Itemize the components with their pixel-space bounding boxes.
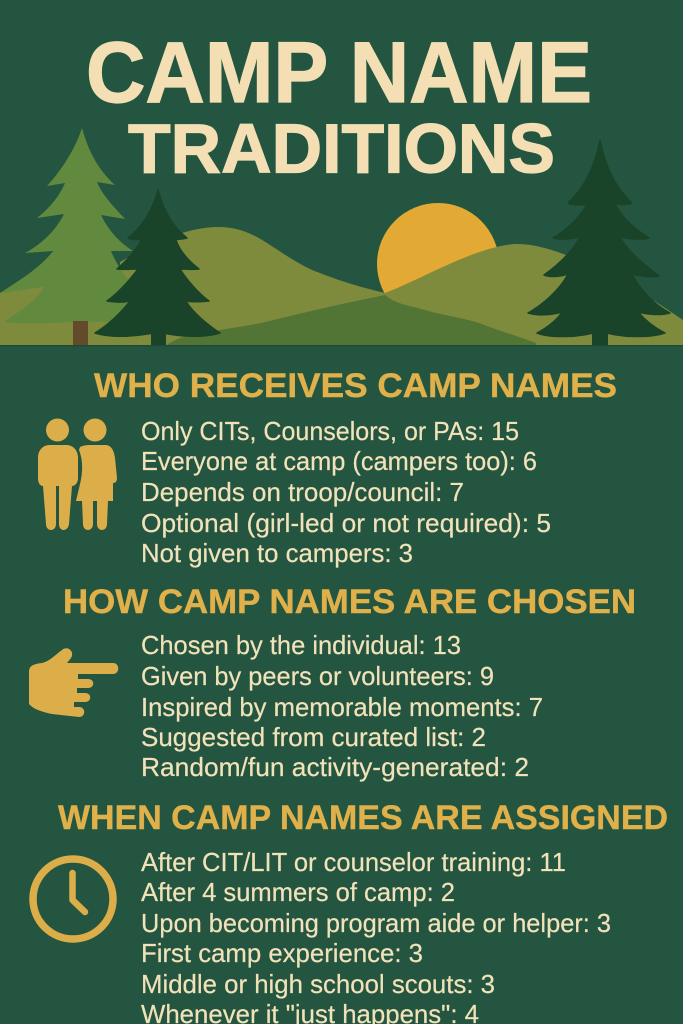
panel: how camp names are chosen: [29, 583, 636, 782]
list: when assigned: First camp experience: 3: [141, 938, 423, 968]
icon: clock: [33, 859, 113, 939]
light green tree: [0, 128, 150, 346]
list: how chosen: Suggested from curated list: 2: [141, 722, 486, 752]
list: who receives: Only CITs, Counselors, or PAs: 15: [141, 416, 519, 446]
list: how chosen: Given by peers or volunteers: 9: [141, 661, 494, 691]
dark tree left: [95, 190, 220, 346]
heading: how chosen: HOW CAMP NAMES ARE CHOSEN: [63, 583, 636, 621]
ground line: [0, 345, 683, 346]
list: who receives: [141, 416, 551, 568]
olive patch over tree: [0, 287, 44, 322]
list: when assigned: Middle or high school scouts: 3: [141, 969, 495, 999]
list: who receives: Depends on troop/council: 7: [141, 477, 464, 507]
list: when assigned: After CIT/LIT or counselor training: 11: [141, 847, 566, 877]
heading: when assigned: WHEN CAMP NAMES ARE ASSIGNED: [58, 799, 668, 837]
list: how chosen: Inspired by memorable moments: 7: [141, 692, 543, 722]
list: how chosen: Random/fun activity-generated: 2: [141, 752, 529, 782]
right olive hill: [385, 244, 683, 346]
left ground: [0, 320, 200, 346]
landscape illustration: [0, 128, 683, 346]
panel: when camp names are assigned: [33, 799, 668, 1024]
title: CAMP NAME: [86, 25, 592, 121]
icon: pointing hand: [29, 648, 118, 717]
list: who receives: Not given to campers: 3: [141, 538, 413, 568]
sun: [377, 203, 499, 325]
front green hill: [165, 295, 536, 346]
title: TRADITIONS: [128, 110, 555, 188]
dark tree right: [528, 140, 670, 346]
left olive hill: [120, 227, 560, 346]
list: when assigned: Upon becoming program aide or helper: 3: [141, 908, 611, 938]
list: how chosen: [141, 630, 543, 782]
list: when assigned: [141, 847, 611, 1024]
title: [86, 25, 592, 188]
heading: who receives: WHO RECEIVES CAMP NAMES: [94, 367, 617, 405]
list: when assigned: After 4 summers of camp: 2: [141, 877, 455, 907]
panel: who receives camp names: [38, 367, 617, 568]
list: who receives: Optional (girl-led or not required): 5: [141, 508, 551, 538]
list: how chosen: Chosen by the individual: 13: [141, 630, 461, 660]
list: who receives: Everyone at camp (campers too): 6: [141, 446, 537, 476]
icon: two people: [38, 418, 117, 530]
